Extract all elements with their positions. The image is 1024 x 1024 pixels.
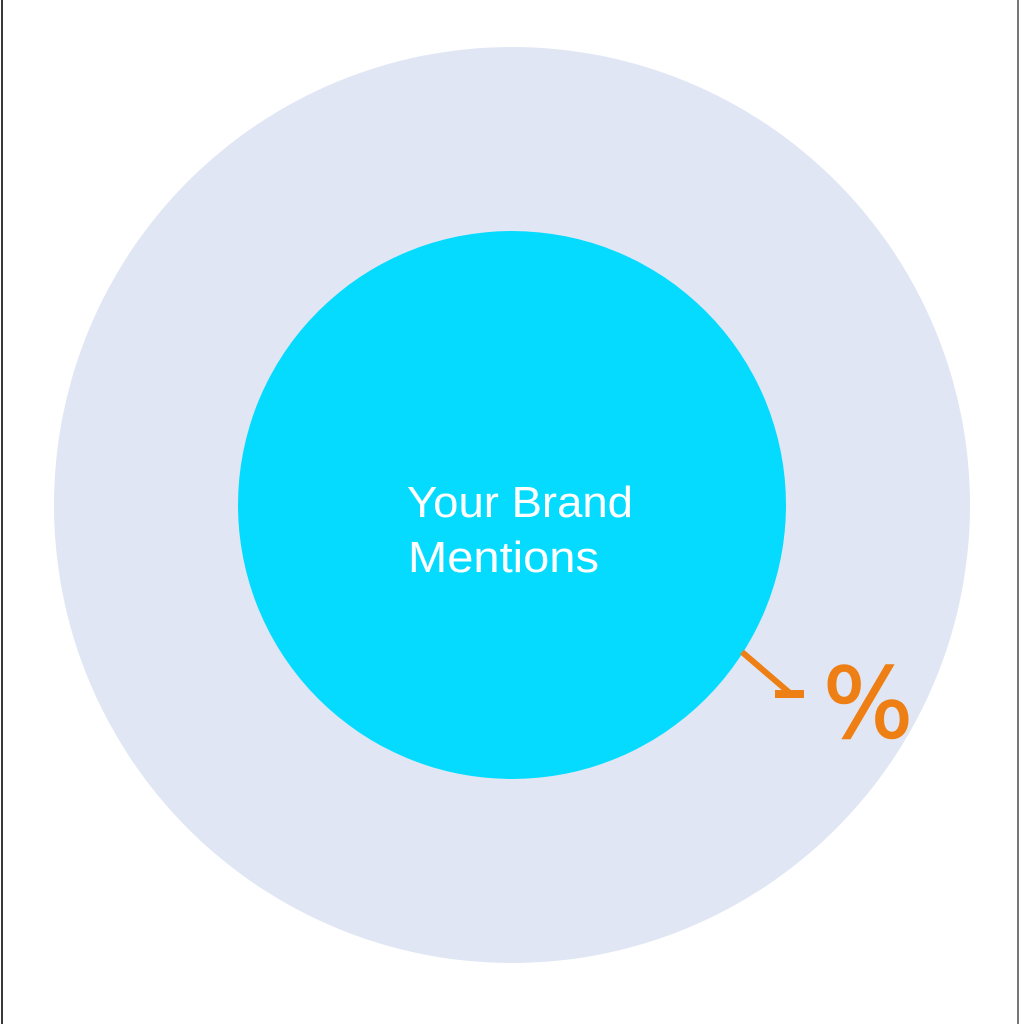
label: Your Brand Mentions: Mentions <box>408 533 599 582</box>
label: Your Brand Mentions <box>407 478 633 582</box>
percentage symbol: % <box>823 647 913 760</box>
inner circle: your brand mentions <box>238 231 786 779</box>
label: Your Brand Mentions: Your Brand <box>407 478 633 527</box>
arrow: pointer to percentage <box>742 652 804 694</box>
